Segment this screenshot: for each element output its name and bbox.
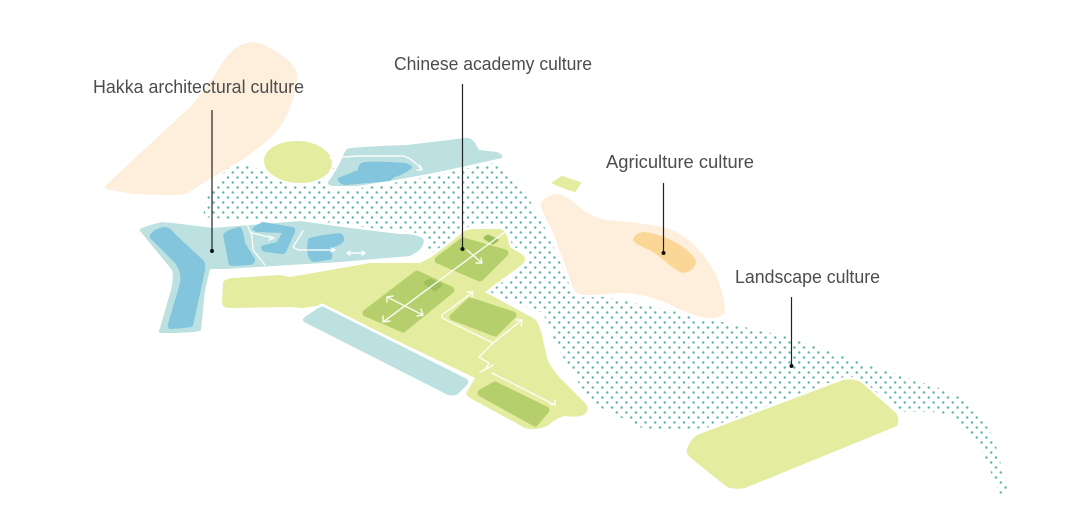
Hakka teal zone (140, 221, 424, 333)
Y-shaped pond (150, 227, 205, 329)
teal strip (303, 306, 468, 395)
terrace A (438, 241, 505, 278)
label: Landscape culture (735, 267, 880, 368)
leader: Hakka (210, 110, 214, 253)
terrace C (453, 301, 513, 333)
academy arrows (383, 232, 505, 322)
label: Landscape culture: Landscape culture (735, 267, 880, 287)
label: Chinese academy culture (394, 54, 592, 251)
leader: Landscape (790, 297, 794, 368)
field: lower-right green plot (687, 379, 898, 489)
pond 4 (307, 233, 344, 262)
upper teal arrow (330, 155, 422, 170)
green academy zone (222, 229, 588, 429)
terrace B (366, 274, 451, 329)
label: Agriculture culture (606, 152, 754, 255)
small building 2 (485, 236, 497, 243)
label: Hakka architectural culture: Hakka architectural culture (93, 77, 304, 97)
pond 2 (223, 227, 255, 266)
small green plot (553, 177, 580, 191)
green ellipse (262, 138, 334, 186)
pond 3 (252, 222, 295, 254)
label: Chinese academy culture: Chinese academy culture (394, 54, 592, 74)
beige zone: Hakka hill (105, 42, 297, 195)
label: Hakka architectural culture (93, 77, 304, 253)
agriculture core area (633, 232, 696, 273)
upper teal zone (328, 138, 502, 186)
upper pond (338, 162, 412, 185)
Hakka paths (247, 224, 365, 265)
label: Agriculture culture: Agriculture culture (606, 152, 754, 172)
beige zone: agriculture (540, 194, 725, 318)
leader: Chinese academy (460, 84, 464, 251)
small building 1 (425, 280, 441, 290)
route arrows (442, 292, 555, 405)
terrace D (481, 385, 546, 423)
leader: Agriculture (662, 183, 666, 255)
dotted landscape zone (203, 162, 1009, 495)
